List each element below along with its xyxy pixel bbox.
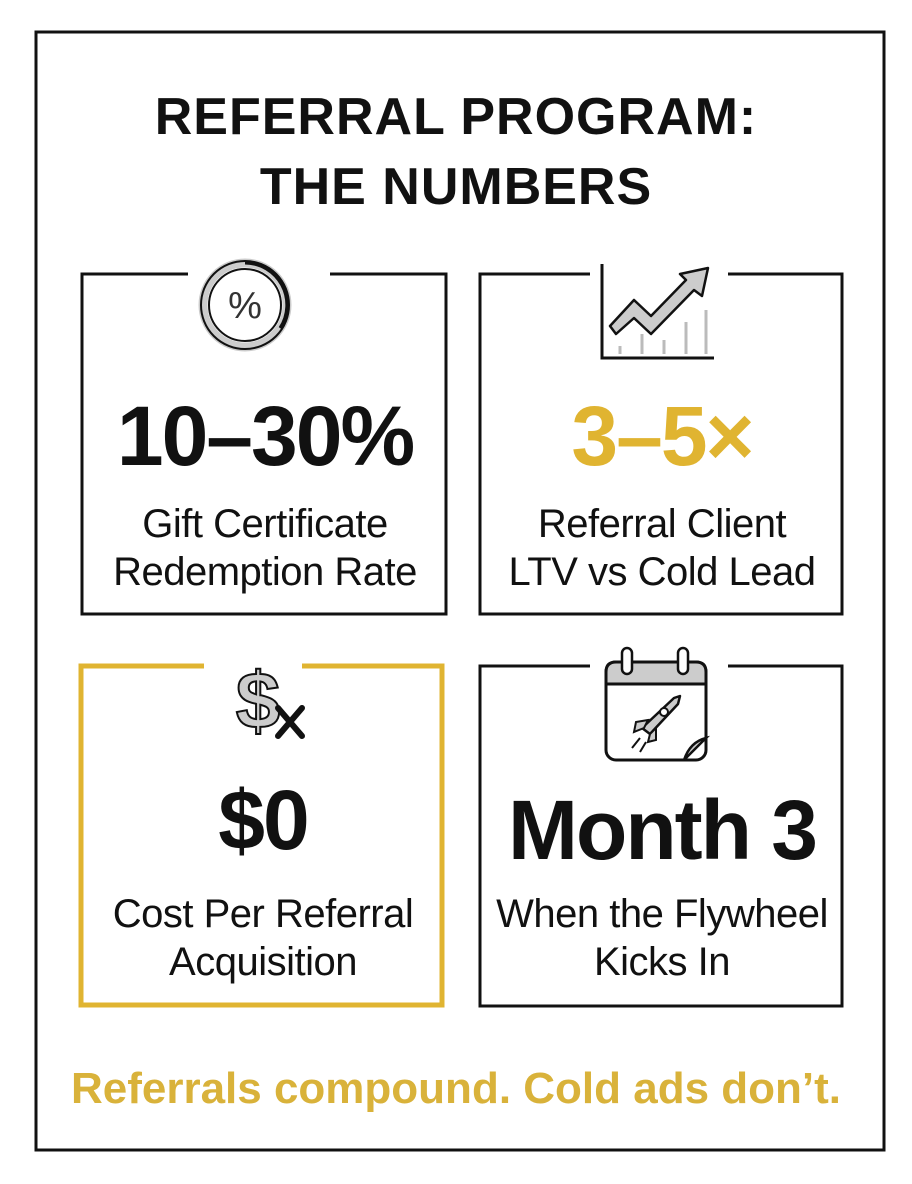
label: LTV vs Cold Lead xyxy=(508,550,815,594)
icon: calendar rocket xyxy=(604,646,710,762)
number: $0 xyxy=(218,773,308,867)
panel: redemption rate xyxy=(80,258,448,616)
label: Kicks In xyxy=(594,940,730,984)
label xyxy=(113,892,413,984)
label: Cost Per Referral xyxy=(113,892,413,936)
label xyxy=(508,502,815,594)
label: Acquisition xyxy=(169,940,357,984)
title: THE NUMBERS xyxy=(260,158,652,216)
number: 3–5× xyxy=(571,389,753,483)
label: Redemption Rate xyxy=(113,550,417,594)
label: When the Flywheel xyxy=(496,892,828,936)
footer tagline: Referrals compound. Cold ads don’t. xyxy=(71,1064,841,1113)
icon: dollar crossed: $ xyxy=(236,656,280,745)
panel: month 3 xyxy=(478,646,844,1008)
label xyxy=(113,502,417,594)
panel: cost xyxy=(78,656,444,1008)
icon: dollar crossed xyxy=(236,656,305,745)
label xyxy=(496,892,828,984)
panel: LTV xyxy=(478,264,844,616)
icon: percent ring: % xyxy=(228,285,262,327)
label: Gift Certificate xyxy=(142,502,388,546)
number: Month 3 xyxy=(508,783,816,877)
label: Referral Client xyxy=(538,502,786,546)
icon: rising chart xyxy=(600,264,714,360)
title: REFERRAL PROGRAM: xyxy=(155,88,757,146)
icon: percent ring xyxy=(198,258,292,352)
title xyxy=(155,88,757,216)
number: 10–30% xyxy=(117,389,413,483)
